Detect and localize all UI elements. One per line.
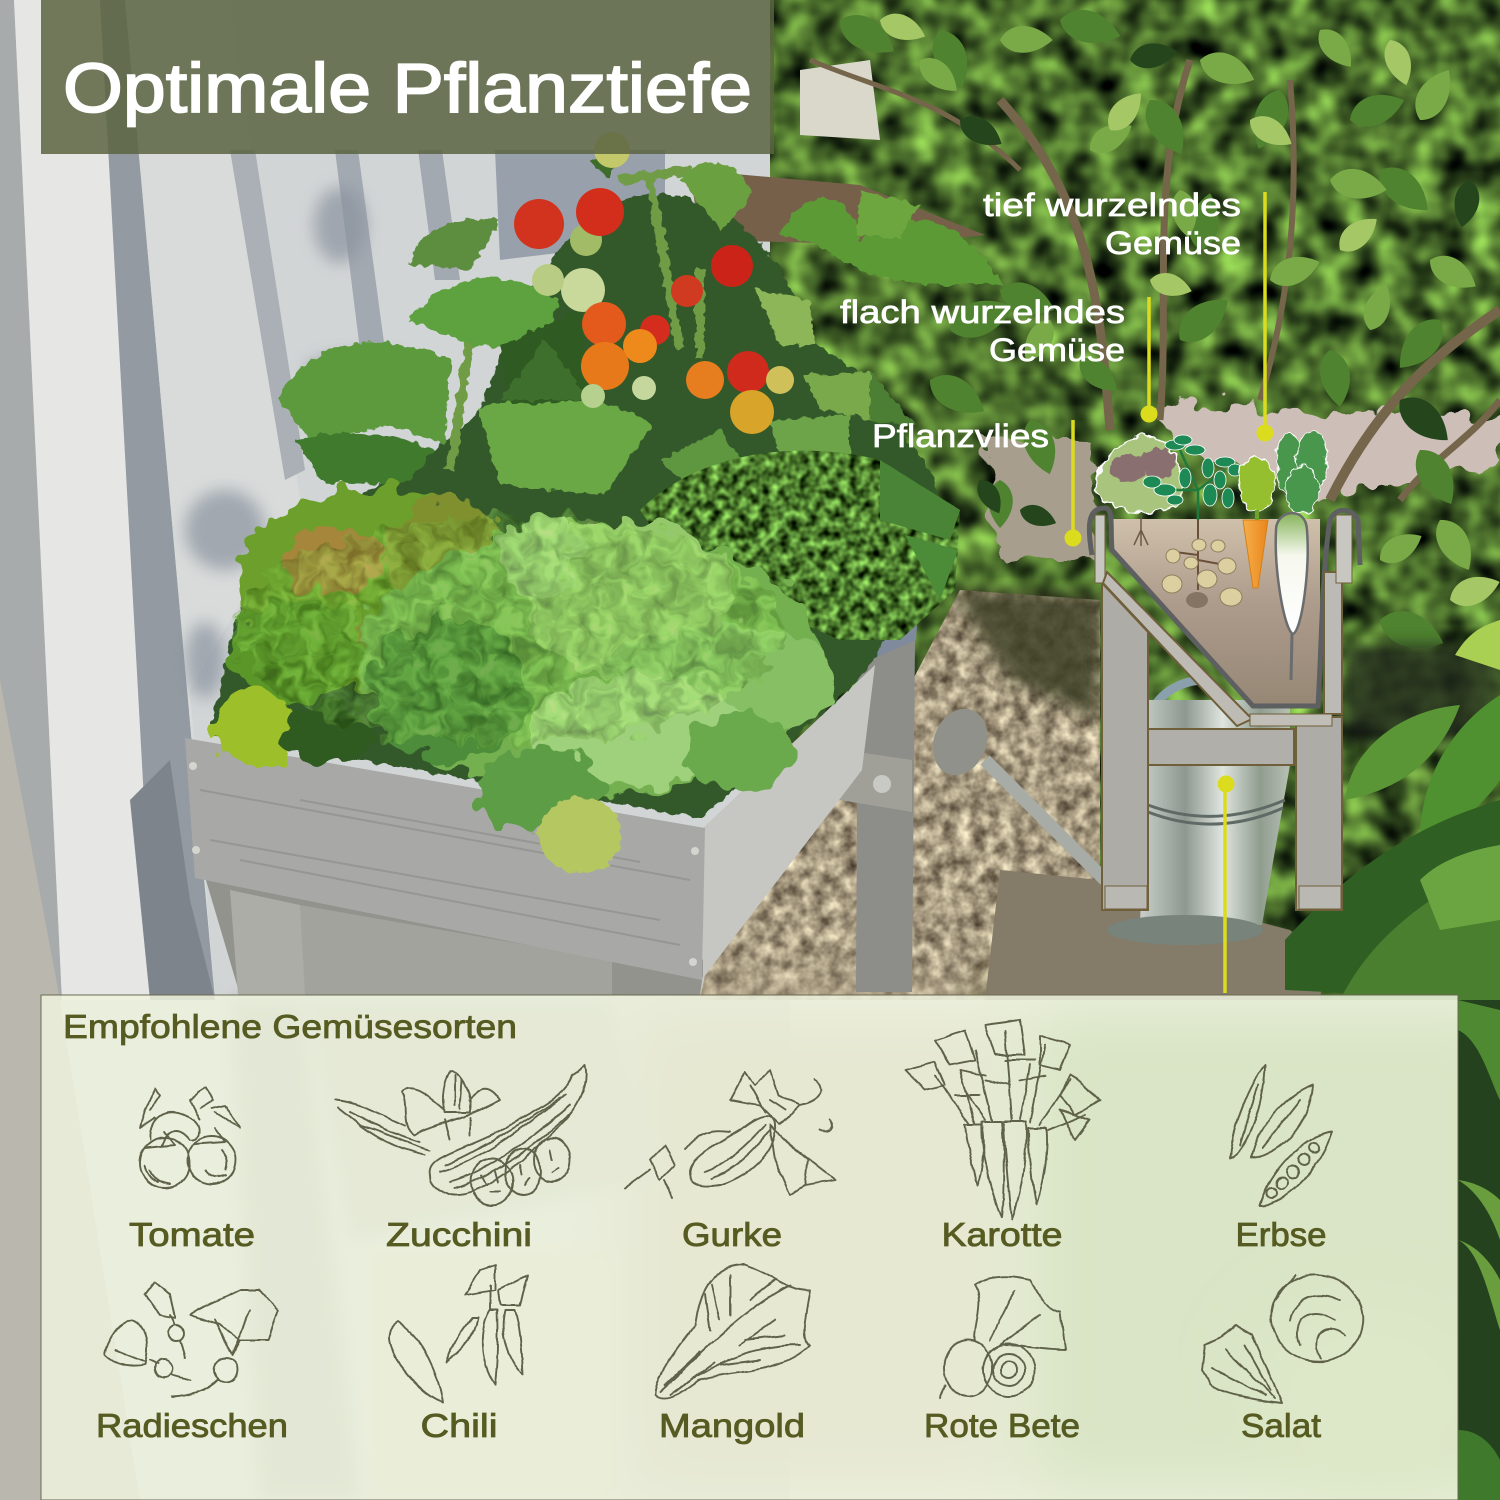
red-tinged lettuce bbox=[215, 490, 505, 772]
soil bbox=[1110, 519, 1320, 707]
callout: Pflanzvlies: Pflanzvlies bbox=[872, 418, 1049, 454]
bright green lettuce bbox=[360, 515, 840, 832]
callout: tief wurzelndes Gemüse bbox=[983, 187, 1274, 442]
callout: flach wurzelndes Gemüse: Gemüse bbox=[989, 332, 1125, 368]
item: Erbse bbox=[1230, 1065, 1332, 1253]
title bar bbox=[41, 0, 774, 154]
item: Chili bbox=[390, 1265, 528, 1444]
vegetable plants bbox=[210, 132, 1003, 873]
item: Mangold: Mangold bbox=[659, 1407, 805, 1444]
item: Tomate bbox=[129, 1088, 255, 1253]
item: Salat: Salat bbox=[1241, 1407, 1321, 1444]
lower photo continuation behind panel bbox=[230, 1000, 1500, 1500]
callout: flach wurzelndes Gemüse: flach wurzelndes bbox=[840, 294, 1125, 330]
item: Zucchini bbox=[335, 1065, 586, 1253]
bed front board bbox=[185, 738, 705, 980]
radish in diagram bbox=[1276, 430, 1327, 680]
item: Chili: Chili bbox=[420, 1407, 498, 1444]
bed side board bbox=[703, 665, 875, 978]
item: Salat bbox=[1202, 1265, 1373, 1444]
gravel ground bbox=[700, 590, 1100, 1000]
bottom plate and crossbar bbox=[1148, 714, 1332, 765]
lettuce in diagram bbox=[1095, 435, 1183, 546]
liner fleece bbox=[1089, 508, 1360, 706]
wooden wall bbox=[0, 0, 790, 1500]
bed left leg and lower panel bbox=[200, 860, 705, 995]
item: Radieschen: Radieschen bbox=[96, 1407, 288, 1444]
left leg bbox=[1095, 515, 1148, 910]
item: Tomate: Tomate bbox=[129, 1216, 255, 1253]
callout: Pflanzvlies bbox=[872, 418, 1082, 546]
item: Zucchini: Zucchini bbox=[386, 1216, 532, 1253]
panel heading: Empfohlene Gemüsesorten bbox=[63, 1008, 517, 1045]
right leg and wall bbox=[1296, 515, 1352, 910]
raised bed bbox=[185, 575, 920, 995]
lettuce texture bbox=[235, 515, 785, 745]
tomatoes bbox=[514, 132, 794, 434]
title: Optimale Pflanztiefe bbox=[63, 49, 752, 127]
item: Radieschen bbox=[96, 1282, 288, 1444]
watering can bbox=[924, 680, 1205, 880]
kale bbox=[640, 451, 960, 640]
metal bucket bbox=[1107, 700, 1290, 945]
planting diagram bbox=[1089, 430, 1360, 910]
dark plant mass behind bbox=[210, 194, 941, 818]
yellow lettuce leaf over bed bbox=[538, 797, 622, 873]
callout: tief wurzelndes Gemüse: tief wurzelndes bbox=[983, 187, 1241, 223]
carrot in diagram bbox=[1239, 456, 1275, 588]
bright leaves at right bbox=[1285, 620, 1500, 1000]
diagonal board bbox=[1103, 572, 1252, 726]
item: Karotte: Karotte bbox=[942, 1216, 1062, 1253]
item: Gurke bbox=[625, 1070, 835, 1253]
panel: recommended vegetables bbox=[41, 776, 1458, 1500]
right leg bbox=[810, 575, 920, 992]
item: Rote Bete: Rote Bete bbox=[924, 1407, 1080, 1444]
tomato and cucumber foliage bbox=[278, 155, 1003, 495]
potato plant in diagram bbox=[1143, 435, 1242, 608]
callout line into panel bbox=[1218, 776, 1234, 993]
callout: flach wurzelndes Gemüse bbox=[840, 294, 1158, 422]
stone plinth bbox=[985, 870, 1325, 1000]
item: Gurke: Gurke bbox=[682, 1216, 782, 1253]
item: Erbse: Erbse bbox=[1236, 1216, 1326, 1253]
item: Rote Bete bbox=[924, 1277, 1080, 1444]
item: Karotte bbox=[905, 1020, 1100, 1253]
garden tree foliage bbox=[690, 0, 1500, 1000]
callout: tief wurzelndes Gemüse: Gemüse bbox=[1105, 225, 1241, 261]
item: Mangold bbox=[655, 1265, 810, 1444]
